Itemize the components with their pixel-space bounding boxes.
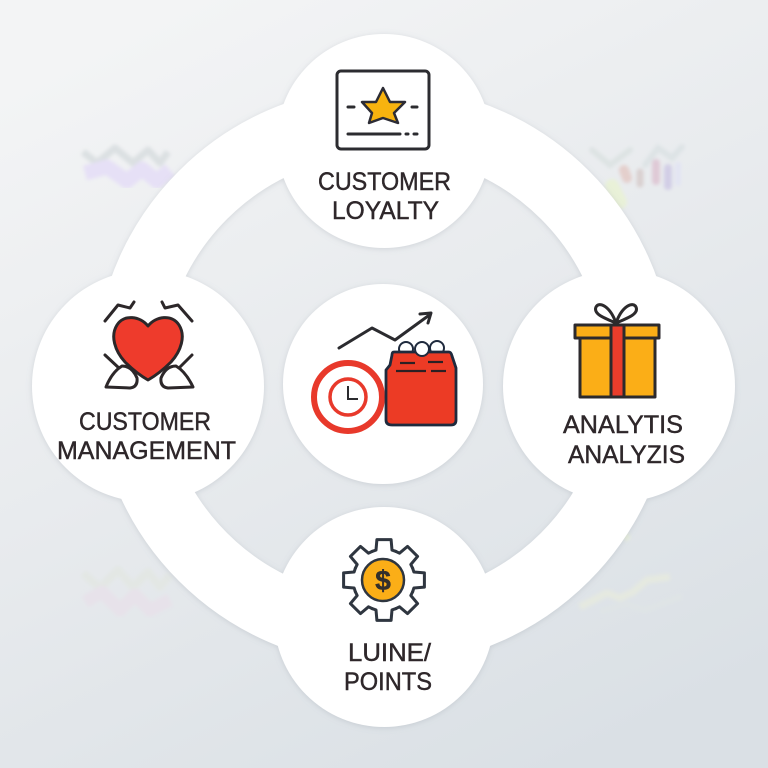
heading: customer loyalty: [318, 168, 451, 225]
heading: analytis analyzis: ANALYTIS: [563, 411, 683, 439]
icon: gift box: [575, 305, 659, 397]
heading: points: LUINE/: [348, 639, 431, 667]
watermark: top right zigzag: [592, 147, 682, 202]
icon: clock: [314, 363, 382, 431]
panel: customer management: [57, 302, 236, 465]
heading: points: POINTS: [344, 668, 432, 696]
heading: customer loyalty: LOYALTY: [332, 197, 439, 225]
heading: customer management: CUSTOMER: [79, 408, 211, 436]
panel: customer loyalty: [318, 71, 451, 225]
panel: points: [344, 540, 432, 696]
icon: red bag: [386, 341, 456, 425]
heading: customer management: [57, 408, 236, 465]
heading: points: [344, 639, 432, 696]
watermark: bottom left zigzag: [83, 570, 170, 610]
icon: gear with coin: $: [375, 565, 391, 596]
watermark: bottom right zigzag: [580, 528, 682, 612]
icon: rising arrow: [339, 313, 431, 348]
watermark: top left zigzag: [83, 148, 170, 181]
heading: customer loyalty: CUSTOMER: [318, 168, 451, 196]
icon: heart with hands: [105, 302, 193, 388]
heading: customer management: MANAGEMENT: [57, 437, 236, 465]
heading: analytis analyzis: ANALYZIS: [568, 441, 685, 469]
icon: star card: [337, 71, 429, 149]
panel: analytis analyzis: [563, 305, 685, 469]
heading: analytis analyzis: [563, 411, 685, 469]
icon: gear with coin: [344, 540, 424, 620]
panel: center: [283, 284, 483, 484]
